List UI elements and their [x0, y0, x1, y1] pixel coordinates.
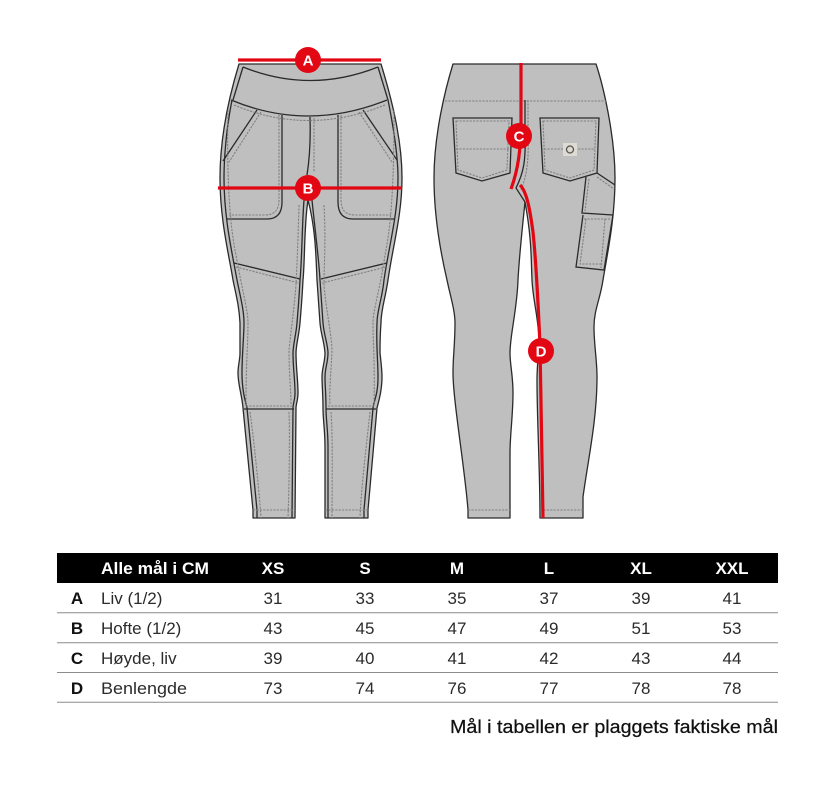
row C: 44: [723, 649, 741, 668]
row B: 51: [632, 619, 650, 638]
illustration: front of trousers: [220, 64, 402, 518]
back trousers silhouette: [434, 64, 615, 518]
row D: [71, 679, 741, 698]
row B: B: [71, 619, 83, 638]
measure B: hip: [218, 175, 402, 201]
row B: 45: [356, 619, 374, 638]
table header: [57, 553, 778, 583]
row A: 33: [356, 589, 374, 608]
table header: L: [544, 559, 554, 578]
table header: Alle mål i CM: [101, 559, 209, 578]
front pockets: [223, 110, 397, 409]
row C: 39: [264, 649, 282, 668]
table header: XS: [262, 559, 284, 578]
back left pocket: [453, 118, 512, 181]
measure A: waist: A: [303, 52, 314, 70]
measure C: rise: C: [514, 128, 525, 146]
table header: S: [359, 559, 371, 578]
footnote: Mål i tabellen er plaggets faktiske mål: [450, 717, 778, 737]
row C: 40: [356, 649, 374, 668]
row C: 43: [632, 649, 650, 668]
row C: 41: [448, 649, 466, 668]
front side seams: [224, 67, 398, 518]
back center seam: [516, 100, 525, 202]
front stitching: [228, 105, 394, 518]
button: [563, 143, 577, 156]
illustration: back of trousers: [434, 64, 615, 518]
row A: A: [71, 589, 83, 608]
row C: 42: [540, 649, 558, 668]
row A: 35: [448, 589, 466, 608]
row D: 78: [723, 679, 741, 698]
front waistband: [231, 67, 387, 116]
row B: Hofte (1/2): [101, 619, 181, 638]
measure B: hip: B: [303, 180, 314, 198]
measure C: rise: [506, 63, 532, 189]
row D: 77: [540, 679, 558, 698]
row B: [71, 619, 741, 638]
side cargo pocket: [576, 173, 615, 270]
row A: [71, 589, 741, 608]
back hem stitching: [468, 509, 583, 511]
table header: XXL: [715, 559, 749, 578]
row A: 31: [264, 589, 282, 608]
row A: 39: [632, 589, 650, 608]
row D: D: [71, 679, 83, 698]
row B: 53: [723, 619, 741, 638]
measure D: inseam: [520, 185, 554, 518]
row C: [71, 649, 741, 668]
row D: 76: [448, 679, 466, 698]
back right pocket: [540, 118, 599, 181]
measure D: inseam: D: [536, 344, 547, 360]
row A: Liv (1/2): [101, 589, 162, 608]
row D: 78: [632, 679, 650, 698]
measure A: waist: [238, 47, 381, 73]
row C: Høyde, liv: [101, 649, 177, 668]
table header: M: [450, 559, 464, 578]
row C: C: [71, 649, 83, 668]
row A: 41: [723, 589, 741, 608]
row D: 73: [264, 679, 282, 698]
row D: 74: [356, 679, 374, 698]
front trousers silhouette: [220, 64, 402, 518]
row B: 49: [540, 619, 558, 638]
row D: Benlengde: [101, 679, 187, 698]
table header: XL: [630, 559, 652, 578]
row B: 43: [264, 619, 282, 638]
size table: [57, 553, 778, 702]
back waistband seam: [445, 100, 606, 102]
row A: 37: [540, 589, 558, 608]
row B: 47: [448, 619, 466, 638]
